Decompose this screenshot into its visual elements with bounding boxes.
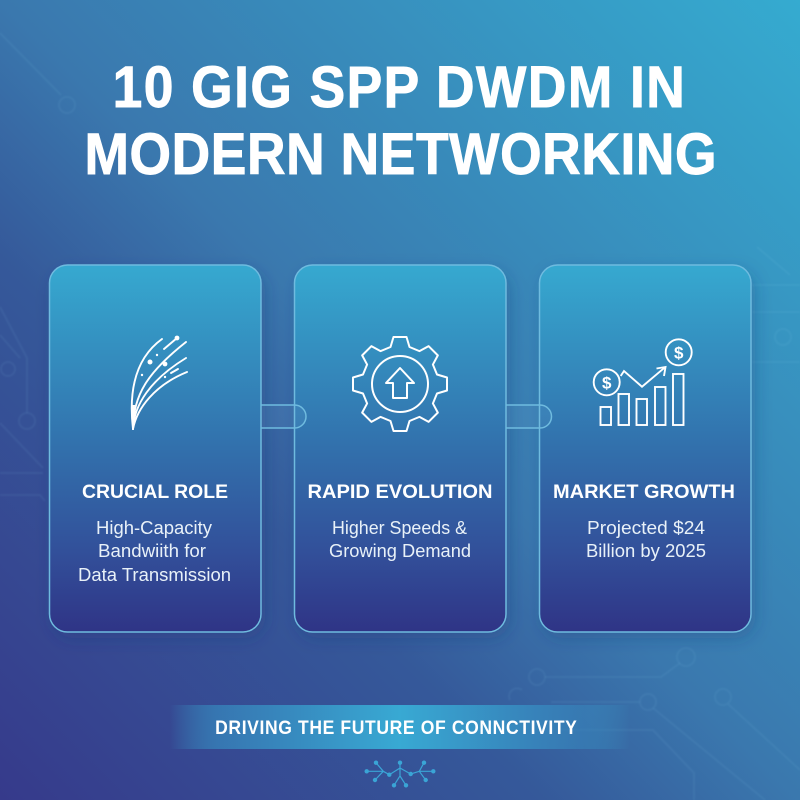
icon: optical fiber strands [132,336,187,430]
connector: rapid evolution to market growth [506,405,552,428]
icon: network nodes [364,760,435,788]
body text: Bandwiith for [98,541,206,561]
title: MODERN NETWORKING [84,122,717,186]
card background [50,265,261,632]
icon: bar chart with dollar coins [594,339,692,425]
body text: Higher Speeds & [332,518,467,538]
body text: Projected $24 [587,518,705,538]
card background [294,265,506,632]
body text [78,518,231,585]
heading: RAPID EVOLUTION [308,481,492,503]
body text [329,518,471,561]
panel: market growth [540,265,751,632]
body text: Billion by 2025 [586,541,706,561]
title [84,55,717,186]
body text: Data Transmission [78,565,231,585]
heading: CRUCIAL ROLE [82,481,228,503]
panel: crucial role [50,265,261,632]
icon: bar chart with dollar coins: $ [674,344,684,362]
icon: bar chart with dollar coins: $ [602,374,612,392]
footer banner [170,705,630,749]
footer banner: DRIVING THE FUTURE OF CONNCTIVITY [215,716,577,738]
icon: gear with up arrow [353,337,447,431]
heading: MARKET GROWTH [553,481,735,503]
card background [540,265,751,632]
body text: High-Capacity [96,518,212,538]
title: 10 GIG SPP DWDM IN [113,55,685,119]
body text [586,518,706,561]
body text: Growing Demand [329,541,471,561]
panel: rapid evolution [294,265,506,632]
connector: crucial role to rapid evolution [261,405,306,428]
card shadows [53,271,755,638]
